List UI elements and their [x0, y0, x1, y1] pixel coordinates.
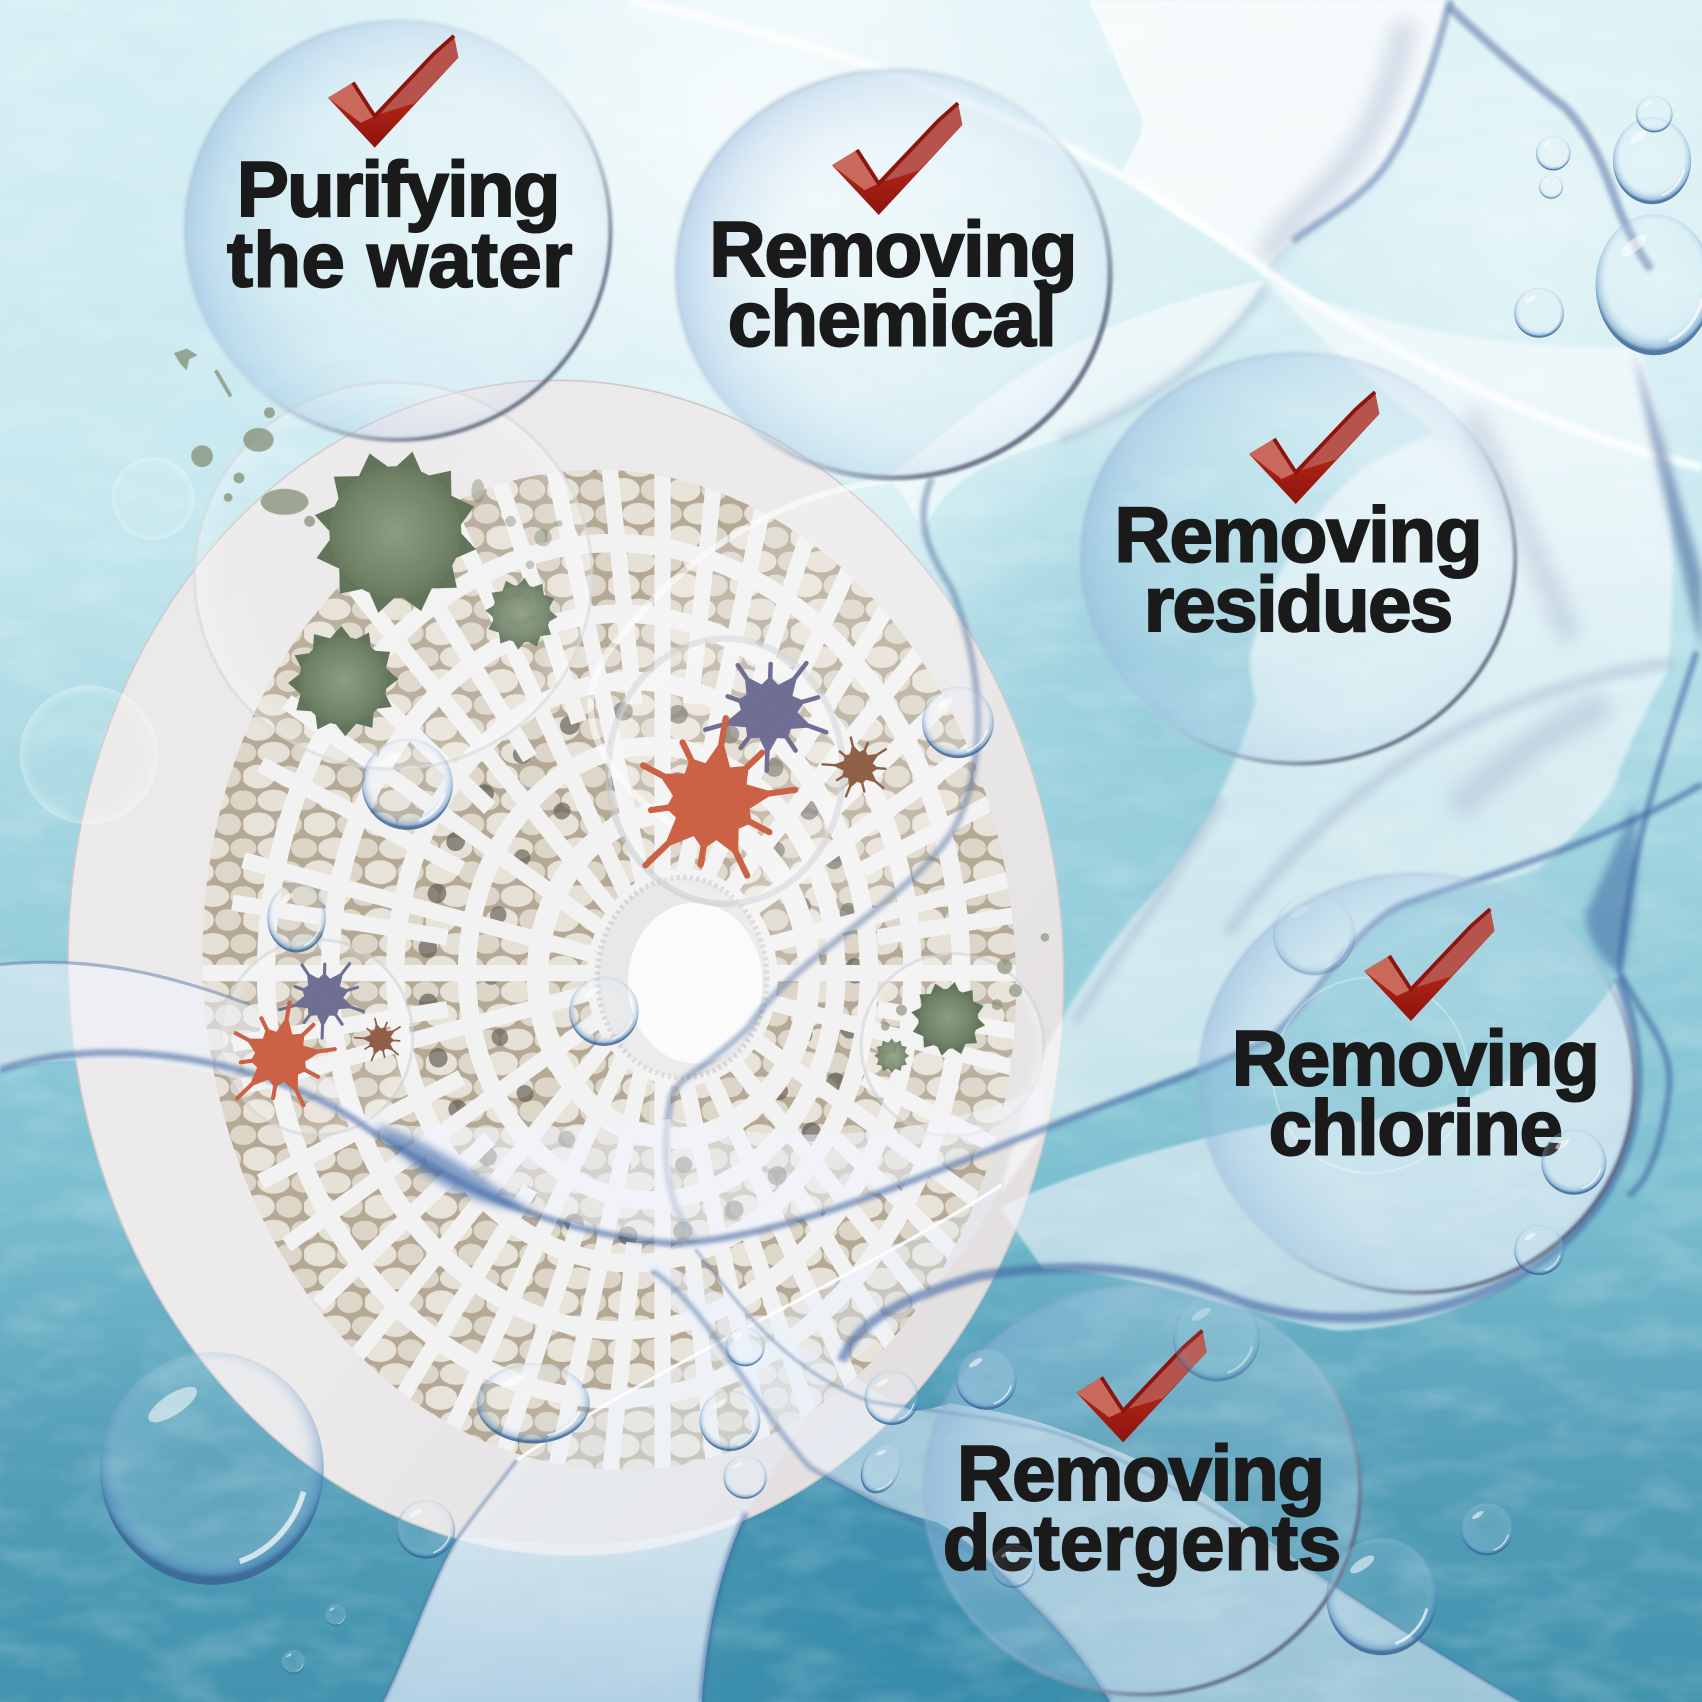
label: removing residues: Removing: [1114, 491, 1483, 579]
bubble: removing residues: [1081, 353, 1515, 764]
label: removing detergents: [943, 1429, 1341, 1586]
faint lens bubbles: [20, 382, 1044, 1136]
ribbon: from bottom left rising: [383, 1185, 1001, 1702]
icon: check mark: [328, 36, 458, 148]
label: removing residues: [1114, 491, 1483, 648]
label: purifying the water: [227, 145, 572, 304]
label: removing chemical: [709, 205, 1077, 362]
icon: check mark: [1076, 1331, 1207, 1442]
ribbon: across disc centre: [591, 478, 978, 1227]
ribbon: left to right sweep: [0, 962, 1045, 1244]
label: removing chlorine: [1232, 1014, 1600, 1172]
label: removing chlorine: chlorine: [1269, 1084, 1563, 1172]
disc outer rim: [38, 355, 1093, 1581]
icon: check mark: [1364, 909, 1495, 1021]
label: removing chemical: Removing: [709, 205, 1077, 293]
ribbon: flowing to bottom right: [619, 1244, 1521, 1702]
grime splatter: [174, 349, 563, 569]
ribbon: right side main white sheet: [1000, 280, 1672, 1195]
green virus group upper: [174, 349, 563, 755]
label: removing detergents: detergents: [943, 1498, 1341, 1586]
label: purifying the water: Purifying: [237, 145, 560, 233]
filter disc product: [67, 380, 1064, 1556]
microbes left lens: [225, 947, 413, 1114]
label: removing chemical: chemical: [728, 274, 1057, 362]
ribbon: connecting upper sheet: [885, 280, 1265, 532]
icon: check mark: [832, 103, 962, 215]
ribbon: lower right sheet: [1000, 978, 1638, 1331]
bubble: purifying the water: [185, 21, 610, 440]
label: removing chlorine: Removing: [1232, 1014, 1600, 1102]
ribbon: swoosh highlight: [630, 0, 1702, 467]
bubble: removing chemical: [676, 70, 1110, 478]
bubble: removing chlorine: [1198, 873, 1635, 1293]
icon: check mark: [1249, 392, 1379, 504]
microbes centre lens: [627, 638, 903, 889]
ribbon: bright band streaks: [1227, 663, 1673, 934]
ribbon: right edge strands: [1449, 7, 1651, 269]
mesh with filter balls: [202, 470, 1016, 1470]
ribbon: top right bright sheet: [1089, 0, 1450, 269]
central hub: [587, 869, 778, 1086]
label: purifying the water: the water: [227, 216, 572, 304]
bubble: removing detergents: [923, 1286, 1360, 1694]
green virus group right: [874, 933, 1049, 1073]
label: removing residues: residues: [1144, 560, 1453, 648]
label: removing detergents: Removing: [957, 1429, 1325, 1517]
